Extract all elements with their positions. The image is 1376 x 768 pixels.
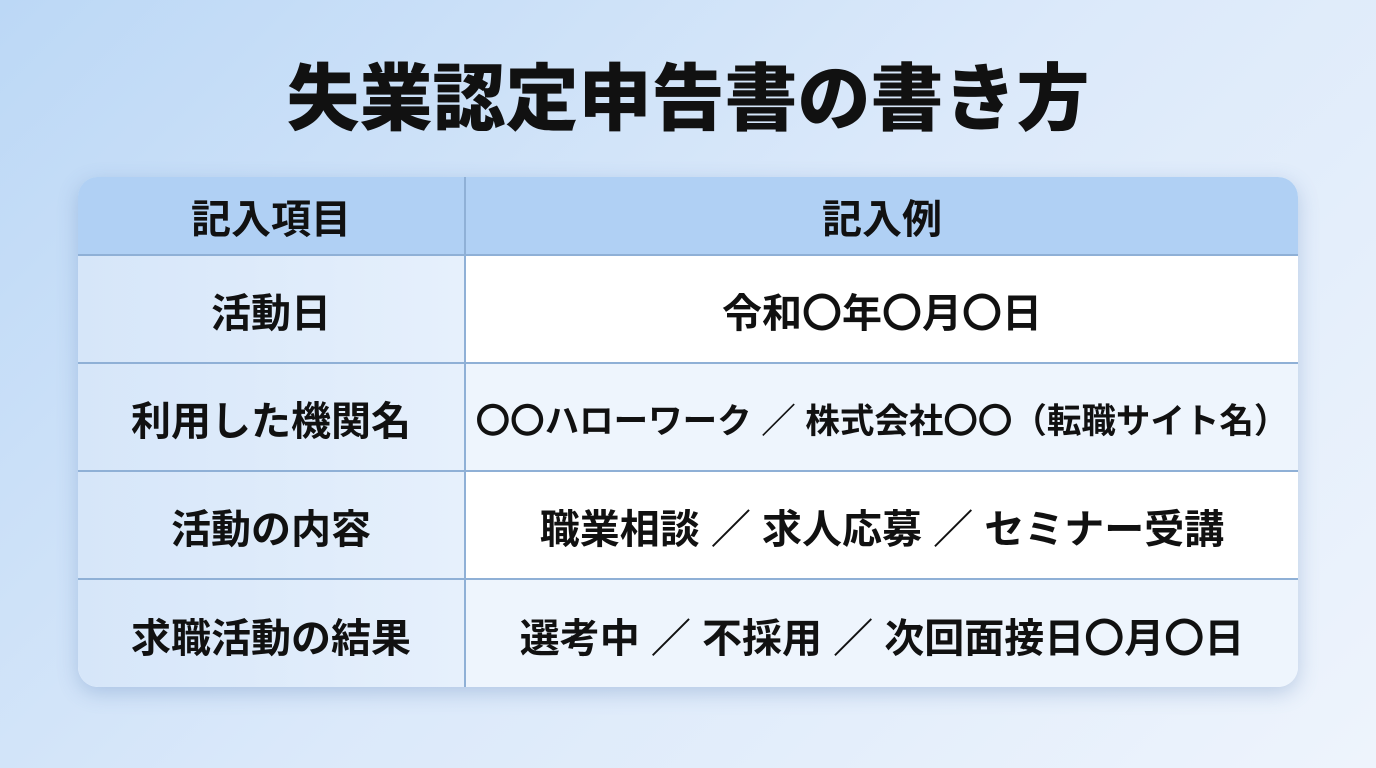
row: 利用した機関名: 〇〇ハローワーク ／ 株式会社〇〇（転職サイト名） [476,403,1288,441]
row: 利用した機関名 [78,362,1298,472]
row: 求職活動の結果: 選考中 ／ 不採用 ／ 次回面接日〇月〇日 [520,616,1244,660]
row: 利用した機関名: 利用した機関名 [131,400,411,444]
row: 求職活動の結果 [78,578,1298,689]
row: 活動日: 令和〇年〇月〇日 [722,292,1042,336]
header row: 記入例 [822,198,942,242]
row: 活動日: 活動日 [211,292,331,336]
row: 活動の内容 [78,470,1298,580]
row: 活動の内容: 職業相談 ／ 求人応募 ／ セミナー受講 [540,508,1224,552]
row: 求職活動の結果: 求職活動の結果 [131,616,411,660]
row: 活動の内容: 活動の内容 [171,508,371,552]
header row: 記入項目 [191,198,351,242]
row: 活動日 [78,254,1298,364]
title: 失業認定申告書の書き方 [286,59,1090,140]
table [78,177,1298,687]
header row [78,177,1298,254]
